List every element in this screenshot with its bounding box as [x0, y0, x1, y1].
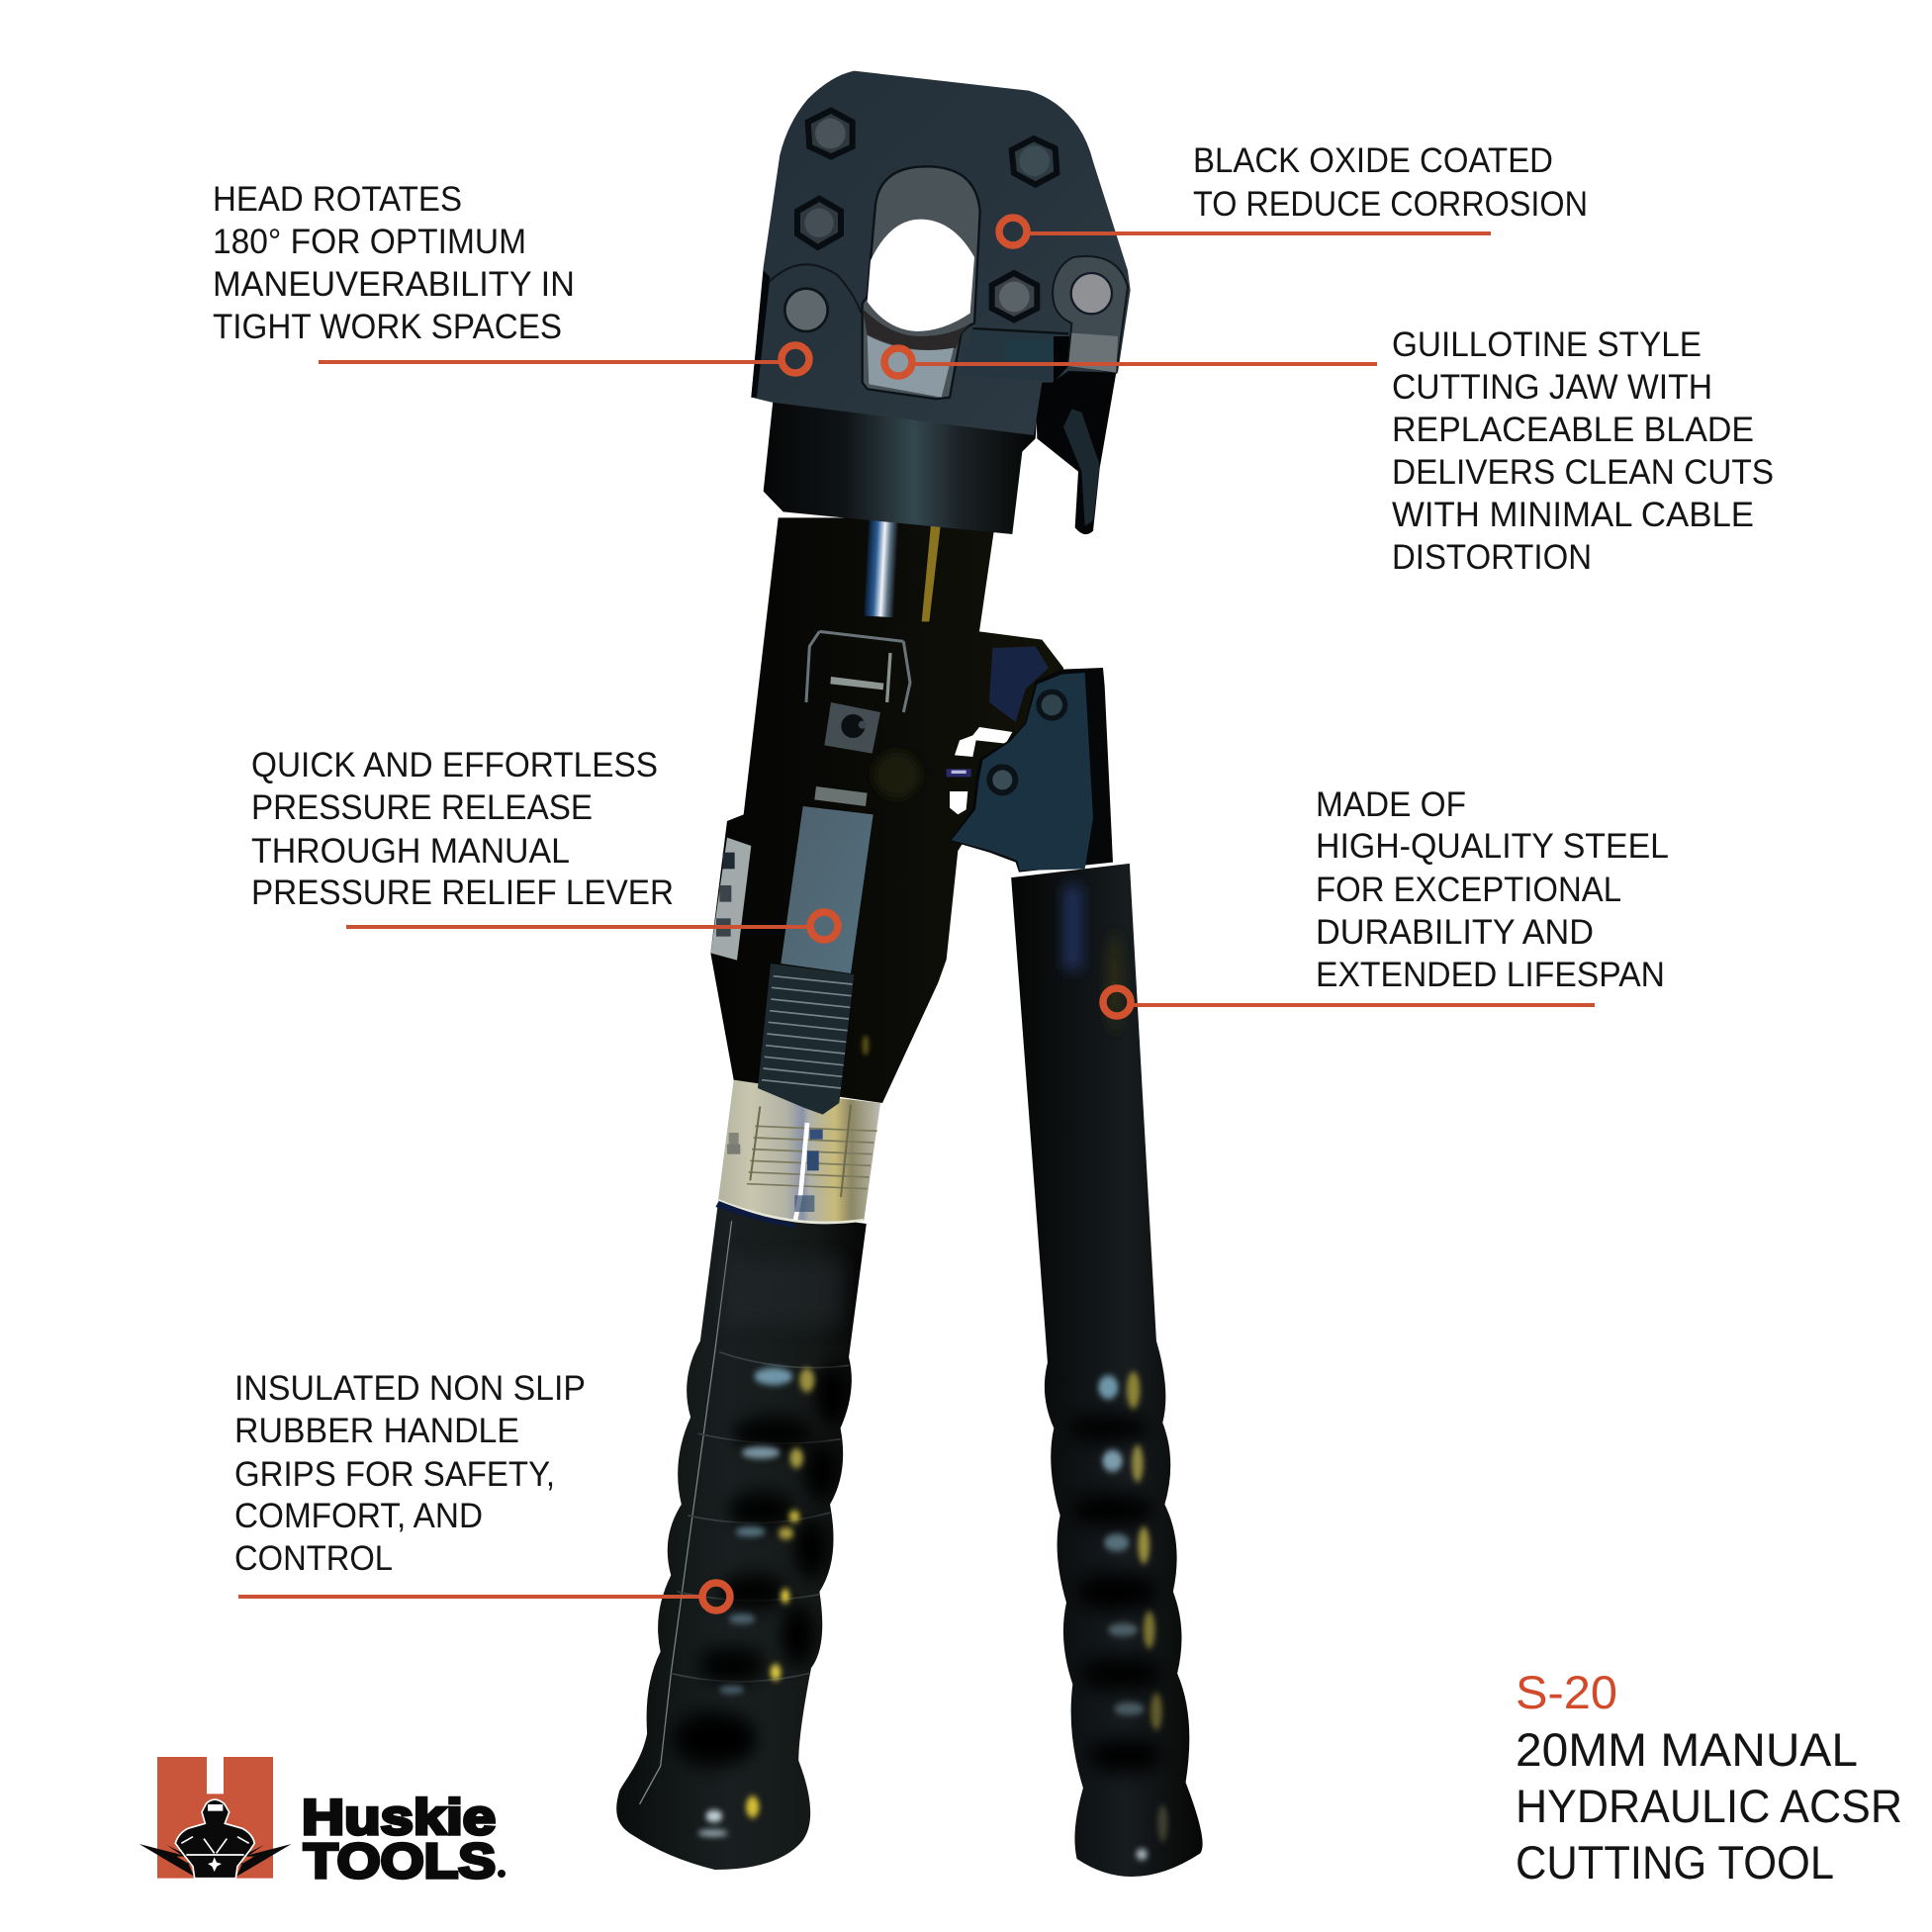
text block: QUICK AND EFFORTLESS	[251, 746, 658, 784]
text block: 180° FOR OPTIMUM	[213, 223, 526, 261]
product title: S-20	[1516, 1666, 1617, 1718]
text block: EXTENDED LIFESPAN	[1316, 956, 1665, 994]
text block: TO REDUCE CORROSION	[1193, 185, 1588, 224]
leader line and ring	[346, 912, 838, 940]
collar	[764, 383, 1037, 534]
side warning sticker	[710, 838, 751, 961]
text block: TIGHT WORK SPACES	[213, 308, 562, 346]
text block: PRESSURE RELIEF LEVER	[251, 874, 674, 912]
left handle grip	[616, 1205, 867, 1870]
wordmark: TOOLS	[304, 1835, 496, 1888]
right pivot lug	[1053, 256, 1128, 373]
text block: MADE OF	[1316, 785, 1466, 824]
text block: CUTTING JAW WITH	[1392, 368, 1712, 407]
leader line and ring	[238, 1583, 730, 1610]
lower right handle grip	[1011, 864, 1203, 1877]
wordmark: Huskie	[302, 1790, 496, 1845]
callout: high-quality steel	[1103, 785, 1669, 1016]
text block: GRIPS FOR SAFETY,	[234, 1455, 555, 1494]
text block: COMFORT, AND	[234, 1497, 483, 1535]
product title: HYDRAULIC ACSR	[1516, 1780, 1902, 1832]
leader line and ring	[1103, 988, 1595, 1016]
latch hook	[1036, 366, 1116, 534]
logo mark: H with lineman and lightning	[139, 1757, 292, 1879]
product title: 20MM MANUAL	[1516, 1723, 1858, 1776]
moving jaw	[960, 329, 1068, 381]
logo: Huskie Tools	[139, 1757, 506, 1888]
callout: black oxide coating	[999, 141, 1588, 245]
cutting head plate	[751, 71, 1131, 435]
left pivot lobe	[769, 264, 862, 314]
pressure relief lever	[781, 786, 874, 973]
text block: DELIVERS CLEAN CUTS	[1392, 453, 1774, 492]
text block: CONTROL	[234, 1539, 393, 1578]
text block: MANEUVERABILITY IN	[213, 265, 575, 304]
text block: INSULATED NON SLIP	[234, 1369, 586, 1408]
text block: PRESSURE RELEASE	[251, 788, 593, 827]
callout: head rotates	[213, 180, 809, 373]
text block: RUBBER HANDLE	[234, 1412, 519, 1450]
text block: REPLACEABLE BLADE	[1392, 411, 1754, 449]
product title: CUTTING TOOL	[1516, 1836, 1834, 1888]
leader line and ring	[319, 345, 809, 373]
text block: THROUGH MANUAL	[251, 832, 570, 871]
text block: DISTORTION	[1392, 538, 1592, 577]
text block	[1392, 325, 1774, 577]
text block	[1316, 785, 1669, 994]
text block	[251, 746, 674, 912]
leader line and ring	[884, 348, 1377, 376]
caution label band	[715, 1080, 880, 1229]
text block	[1193, 141, 1588, 224]
callout: rubber handle grips	[234, 1369, 730, 1610]
text block: FOR EXCEPTIONAL	[1316, 871, 1621, 909]
tool body and cylinder	[710, 517, 1063, 1103]
text block	[234, 1369, 586, 1578]
text block: HIGH-QUALITY STEEL	[1316, 827, 1669, 866]
text block: WITH MINIMAL CABLE	[1392, 496, 1754, 534]
tool: hydraulic cutter photo illustration	[616, 71, 1203, 1877]
pump grip ribs	[758, 964, 854, 1115]
callout: pressure release	[251, 746, 838, 940]
text block: GUILLOTINE STYLE	[1392, 325, 1702, 364]
bolts	[797, 111, 1057, 320]
latch mechanism	[806, 631, 910, 754]
text block: HEAD ROTATES	[213, 180, 462, 219]
product title	[1516, 1666, 1902, 1888]
callout: guillotine jaw	[884, 325, 1774, 577]
text block: DURABILITY AND	[1316, 913, 1594, 952]
text block: BLACK OXIDE COATED	[1193, 141, 1553, 180]
leader line and ring	[999, 218, 1491, 245]
link plate	[950, 668, 1113, 873]
text block	[213, 180, 575, 346]
slot	[863, 166, 980, 399]
wordmark	[302, 1790, 506, 1888]
